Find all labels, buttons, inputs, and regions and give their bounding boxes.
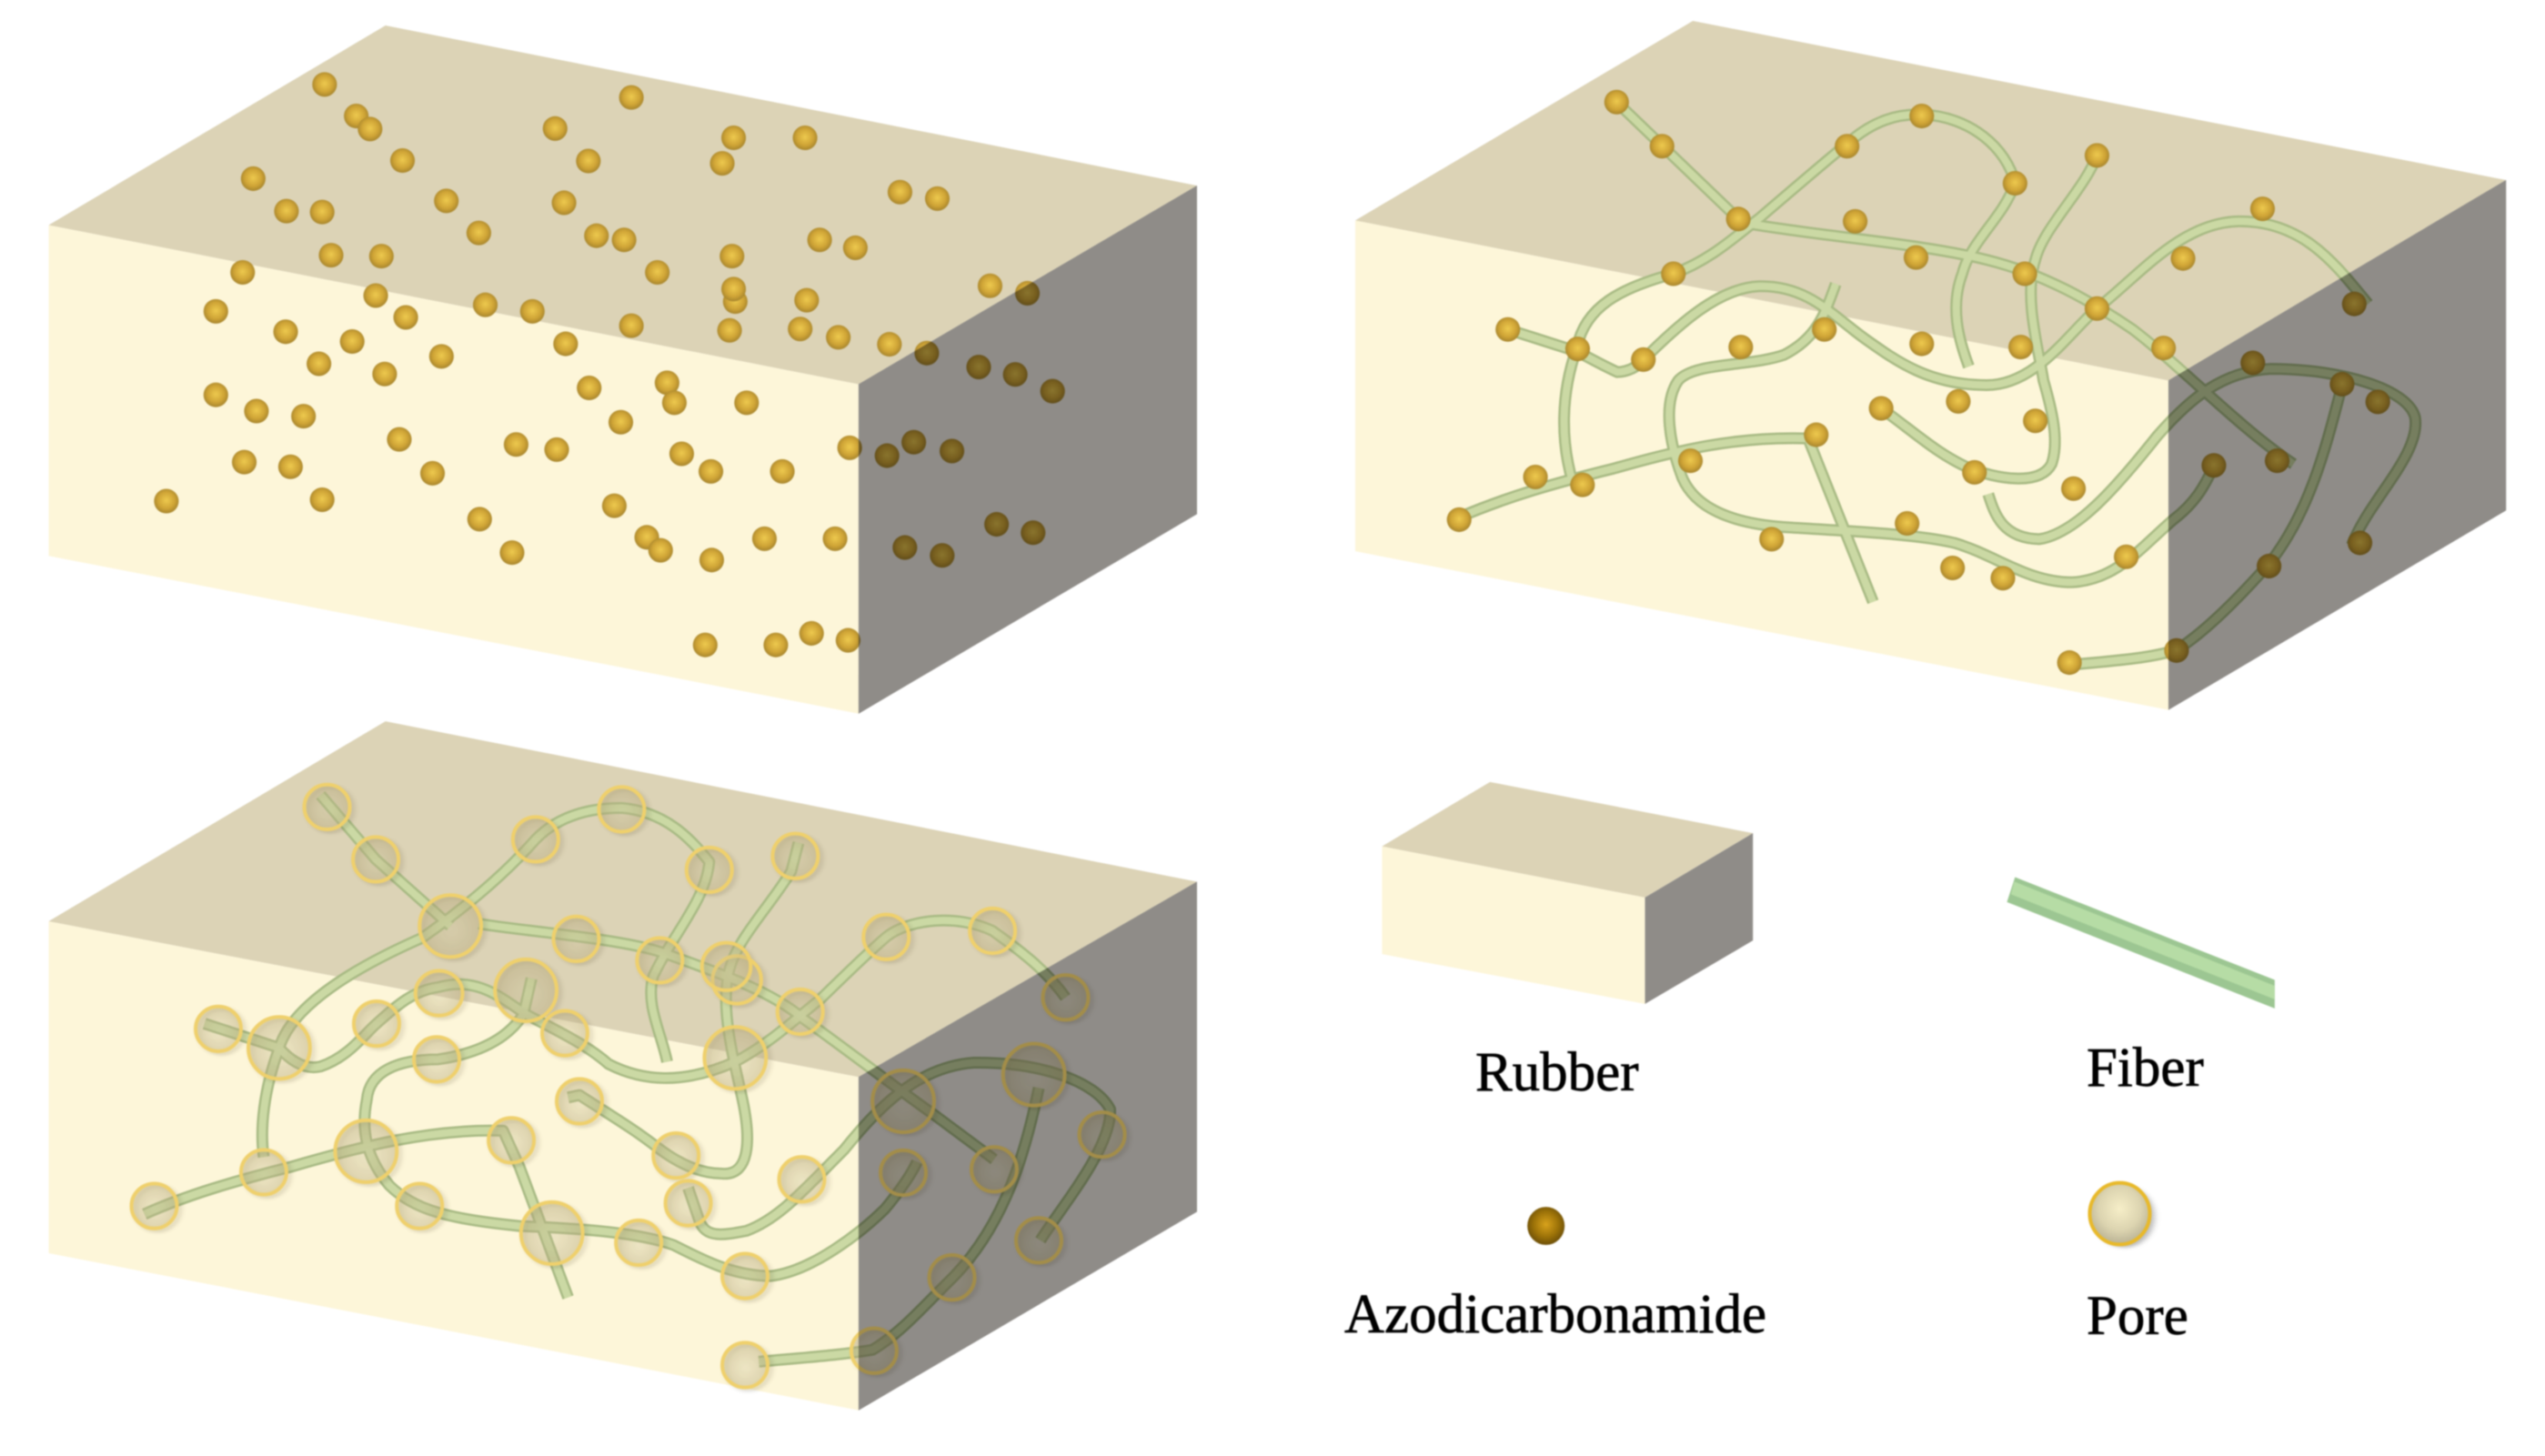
panel: foamed rubber with fibers and pores — [49, 721, 1197, 1411]
rubber block faces — [1355, 21, 2506, 710]
legend: fiber label: Fiber — [2087, 1038, 2204, 1099]
legend: azodicarbonamide icon — [1527, 1207, 1564, 1245]
rubber block faces — [49, 721, 1197, 1411]
particles on fibers — [1447, 90, 2390, 675]
rubber block faces — [49, 25, 1197, 714]
legend: azodicarbonamide label: Azodicarbonamide — [1344, 1284, 1766, 1345]
side face seen through block — [858, 282, 1066, 647]
panel: rubber block with azodicarbonamide particles — [49, 25, 1197, 714]
legend: fiber icon — [2007, 877, 2275, 1009]
pores — [132, 785, 1125, 1388]
fibers and particles — [1447, 90, 2416, 675]
side face seen through block — [2168, 273, 2422, 664]
side face seen through block — [858, 968, 1128, 1376]
panel: legend — [1344, 782, 2275, 1347]
legend: pore icon — [2089, 1183, 2155, 1248]
azodicarbonamide particles — [154, 72, 1065, 658]
fiber network — [1459, 102, 2416, 666]
fiber network — [145, 795, 1111, 1361]
legend: pore label: Pore — [2087, 1286, 2188, 1347]
panel: rubber block with fibers and particles — [1355, 21, 2506, 710]
legend: rubber block icon — [1382, 782, 1753, 1004]
legend: rubber label: Rubber — [1475, 1042, 1639, 1103]
